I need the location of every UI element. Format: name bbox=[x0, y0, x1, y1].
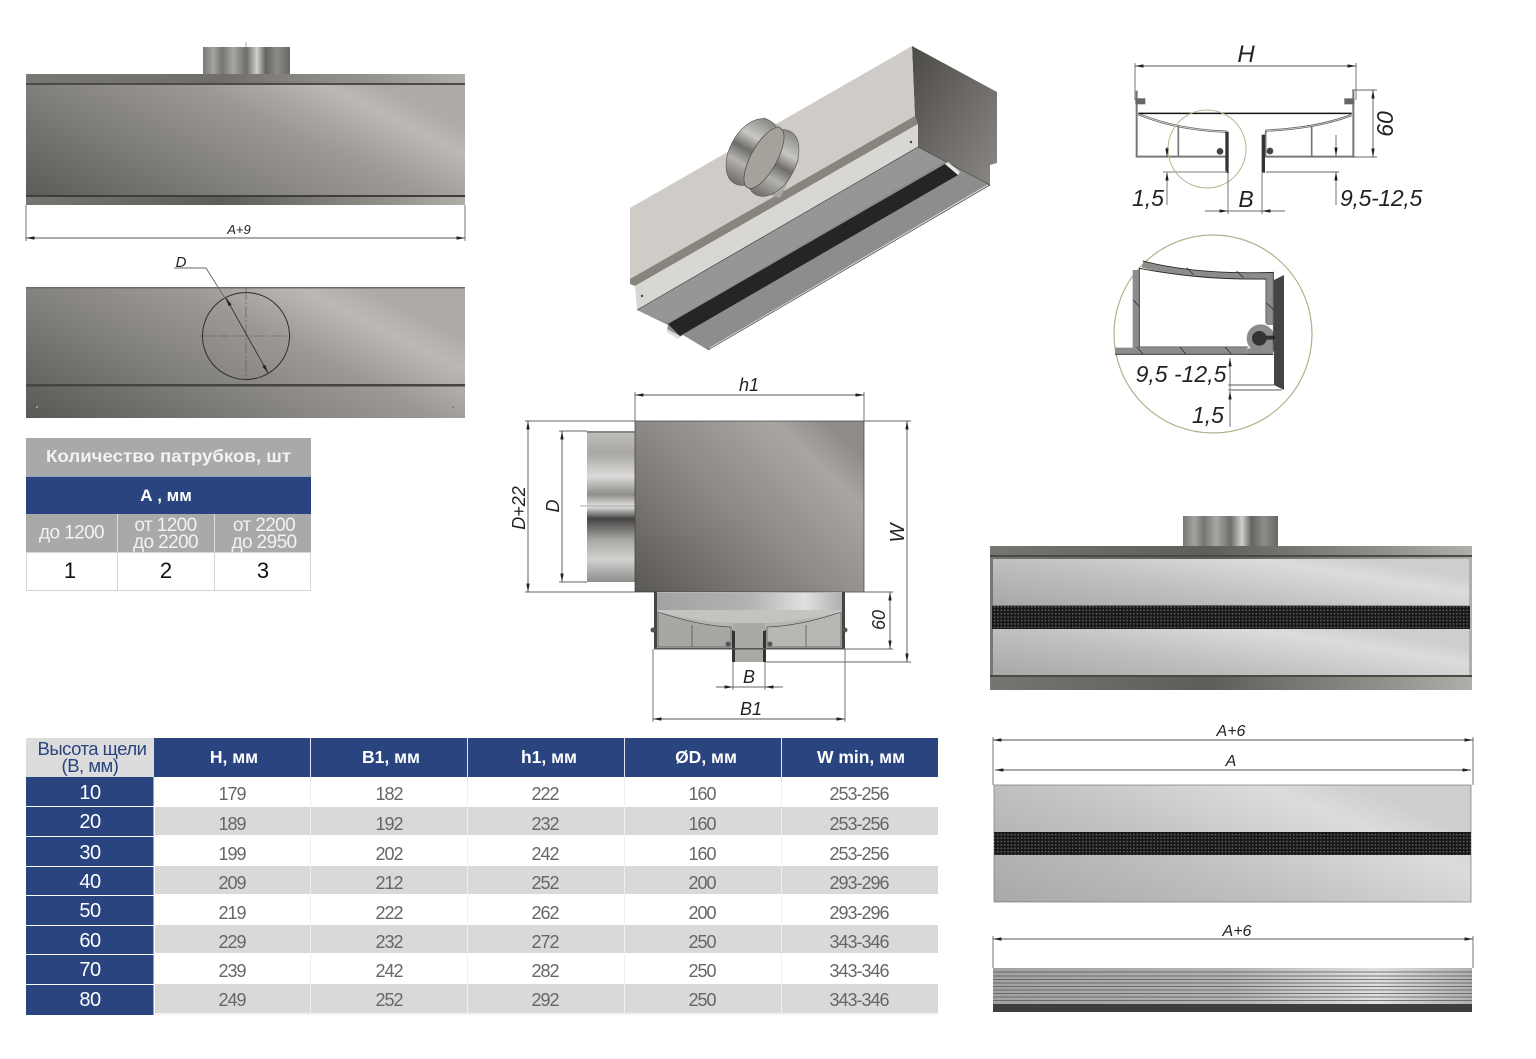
side elevation view bbox=[509, 375, 911, 722]
table values: 200 bbox=[688, 873, 716, 893]
table values: 199 bbox=[218, 844, 246, 864]
table values: 262 bbox=[531, 903, 559, 923]
range row: от 1200 bbox=[134, 515, 197, 536]
A header: А , мм bbox=[140, 486, 192, 505]
table: number of collars bbox=[26, 438, 311, 590]
bottom side view with A+6 bbox=[993, 923, 1473, 1012]
table header: Высота щели bbox=[38, 738, 147, 759]
enlarged profile bbox=[1115, 261, 1284, 390]
detail dimensions: 1,5 bbox=[1192, 402, 1224, 428]
dimension H: H bbox=[1237, 41, 1255, 68]
dimension 60: 60 bbox=[1372, 111, 1398, 137]
table values: 232 bbox=[375, 932, 403, 952]
profile bbox=[1135, 91, 1354, 173]
table header: W min, мм bbox=[817, 747, 905, 767]
dimension D: D bbox=[543, 500, 563, 512]
slot height column: 50 bbox=[79, 900, 101, 922]
dimension B: B bbox=[1238, 186, 1254, 212]
circle D: D bbox=[176, 254, 187, 271]
table values: 189 bbox=[218, 814, 246, 834]
underside bbox=[637, 147, 990, 350]
dimension B bbox=[1205, 173, 1285, 214]
dimension 1,5: 1,5 bbox=[1132, 185, 1164, 211]
table header: (В, мм) bbox=[62, 755, 119, 776]
A header bbox=[26, 476, 311, 514]
table values: 200 bbox=[688, 903, 716, 923]
dimension h1: h1 bbox=[739, 375, 759, 395]
dimension A+6: A+6 bbox=[1216, 723, 1246, 740]
table values: 179 bbox=[218, 784, 246, 804]
dimension B1: B1 bbox=[740, 699, 762, 719]
frame bbox=[990, 546, 1472, 690]
table values: 242 bbox=[375, 961, 403, 981]
dimension B bbox=[716, 662, 783, 690]
table header: H, мм bbox=[210, 747, 258, 767]
table values: 160 bbox=[688, 784, 716, 804]
dimension 1,5 bbox=[1132, 147, 1227, 211]
count row: 1 bbox=[64, 558, 76, 583]
slot height column bbox=[26, 777, 154, 1015]
section drawing with H dimension bbox=[1132, 41, 1423, 214]
dimension A: A bbox=[1225, 753, 1236, 770]
perforated slot bbox=[992, 606, 1470, 629]
flange bbox=[635, 124, 918, 310]
table values: 229 bbox=[218, 932, 246, 952]
end face bbox=[912, 46, 997, 185]
slot height column: 60 bbox=[79, 930, 101, 952]
table values: 253-256 bbox=[829, 784, 890, 804]
perforated slot bbox=[994, 832, 1471, 855]
range row: от 2200 bbox=[233, 515, 295, 536]
count row: 3 bbox=[257, 558, 269, 583]
dimension 60 bbox=[845, 592, 893, 649]
table header bbox=[26, 738, 938, 777]
collar bbox=[1183, 516, 1278, 546]
table values: 232 bbox=[531, 814, 559, 834]
table values: 202 bbox=[375, 844, 403, 864]
table values: 272 bbox=[531, 932, 559, 952]
front view with dimensions A and A+6 bbox=[993, 723, 1473, 902]
table values: 209 bbox=[218, 873, 246, 893]
lower panel bbox=[993, 629, 1469, 675]
circle D bbox=[174, 254, 292, 382]
black slot bbox=[668, 164, 958, 336]
dimension A+6: A+6 bbox=[1222, 923, 1252, 940]
table values: 160 bbox=[688, 844, 716, 864]
slot height column: 40 bbox=[79, 871, 101, 893]
isometric view of plenum bbox=[630, 46, 997, 350]
table values: 212 bbox=[375, 873, 403, 893]
table title bbox=[26, 438, 311, 476]
top face bbox=[630, 46, 915, 281]
table values: 293-296 bbox=[829, 873, 890, 893]
table values: 253-256 bbox=[829, 844, 890, 864]
table values: 293-296 bbox=[829, 903, 890, 923]
table title: Количество патрубков, шт bbox=[46, 446, 291, 466]
table values: 250 bbox=[688, 961, 716, 981]
slot height column: 70 bbox=[79, 959, 101, 981]
count row bbox=[26, 552, 310, 590]
row stripes bbox=[155, 777, 938, 1014]
upper panel bbox=[993, 559, 1469, 605]
dimension A+9: A+9 bbox=[226, 222, 251, 237]
table values: 253-256 bbox=[829, 814, 890, 834]
slot height column: 10 bbox=[79, 782, 101, 804]
table values: 192 bbox=[375, 814, 403, 834]
count row: 2 bbox=[160, 558, 172, 583]
table values: 343-346 bbox=[829, 961, 890, 981]
table values: 252 bbox=[375, 990, 403, 1010]
table values: 219 bbox=[218, 903, 246, 923]
slot section bbox=[650, 592, 848, 662]
top elevation view bbox=[26, 42, 465, 241]
dimension B: B bbox=[743, 667, 755, 687]
dimension 60: 60 bbox=[869, 610, 889, 630]
plan view with collar circle bbox=[26, 254, 465, 418]
detail marker circle bbox=[1168, 110, 1246, 188]
ribbed body bbox=[993, 968, 1472, 1004]
table header: В1, мм bbox=[362, 747, 420, 767]
table values: 249 bbox=[218, 990, 246, 1010]
range row: до 2200 bbox=[133, 532, 198, 553]
table values: 242 bbox=[531, 844, 559, 864]
dimension W: W bbox=[887, 521, 909, 542]
table values: 160 bbox=[688, 814, 716, 834]
front view with collar bbox=[990, 516, 1472, 690]
table: slot height dimensions bbox=[26, 738, 938, 1015]
table values: 343-346 bbox=[829, 990, 890, 1010]
casing side bbox=[635, 421, 864, 592]
dimension 9,5-12,5: 9,5-12,5 bbox=[1340, 185, 1423, 211]
slot height column: 30 bbox=[79, 842, 101, 864]
dark base bbox=[993, 1004, 1472, 1012]
slot height column: 80 bbox=[79, 989, 101, 1011]
plate bbox=[994, 785, 1471, 902]
table values: 252 bbox=[531, 873, 559, 893]
table values: 292 bbox=[531, 990, 559, 1010]
detail enlargement circle bbox=[1114, 235, 1312, 433]
duct body bbox=[26, 74, 465, 205]
table values: 343-346 bbox=[829, 932, 890, 952]
table header: h1, мм bbox=[521, 747, 577, 767]
table header: ØD, мм bbox=[675, 747, 737, 767]
range row: до 1200 bbox=[39, 522, 104, 544]
folded strip bbox=[630, 116, 918, 286]
table values: 222 bbox=[375, 903, 403, 923]
table values: 250 bbox=[688, 932, 716, 952]
dimension D+22: D+22 bbox=[509, 486, 529, 530]
table values: 282 bbox=[531, 961, 559, 981]
detail dimensions: 9,5 -12,5 bbox=[1136, 361, 1227, 387]
table values: 239 bbox=[218, 961, 246, 981]
range row: до 2950 bbox=[232, 532, 297, 553]
dimension 60 bbox=[1352, 90, 1398, 157]
range row bbox=[26, 514, 311, 553]
table values: 222 bbox=[531, 784, 559, 804]
collar side bbox=[587, 431, 635, 582]
detail dimensions bbox=[1136, 358, 1230, 428]
slot height column: 20 bbox=[79, 811, 101, 833]
table values: 182 bbox=[375, 784, 403, 804]
duct collar bbox=[203, 47, 290, 74]
round collar bbox=[715, 110, 810, 205]
duct plate bbox=[26, 287, 465, 418]
table values: 250 bbox=[688, 990, 716, 1010]
table values bbox=[218, 784, 890, 1010]
